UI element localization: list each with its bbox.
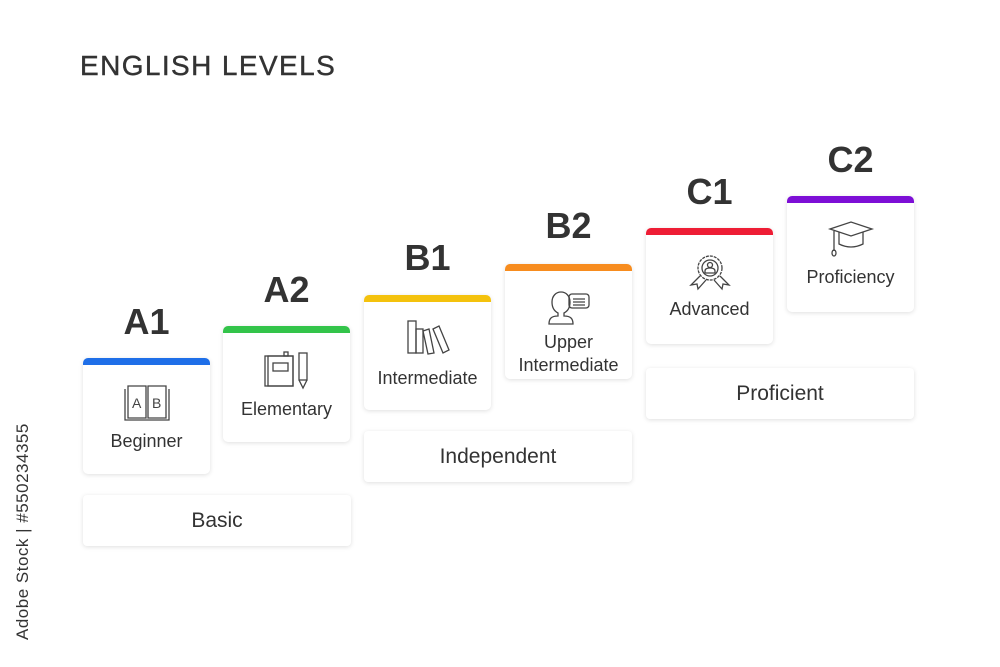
card: C2 Proficiency: Proficiency [806, 267, 895, 287]
card: C2 Proficiency [787, 196, 914, 312]
card: B2 Upper Intermediate [505, 264, 632, 379]
card: B2 Upper Intermediate: Upper [544, 332, 593, 352]
icon: open book AB: B [152, 395, 161, 411]
card: C1 Advanced [646, 228, 773, 344]
level label B2: B2 [545, 205, 592, 246]
group: Independent: Independent [440, 445, 556, 468]
group: Basic [83, 495, 351, 546]
icon: award badge [689, 255, 731, 290]
level label A1: A1 [123, 301, 170, 342]
level label C1: C1 [686, 171, 733, 212]
level label A2: A2 [263, 269, 310, 310]
group: Basic: Basic [191, 509, 243, 532]
card: A2 Elementary: Elementary [241, 399, 332, 419]
credit text: Adobe Stock | #550234355 [13, 423, 32, 640]
title: ENGLISH LEVELS [80, 50, 336, 81]
group: Independent [364, 431, 632, 482]
card: B1 Intermediate: Intermediate [377, 368, 478, 388]
card: A2 Elementary [223, 326, 350, 442]
group: Proficient [646, 368, 914, 419]
level label C2: C2 [827, 139, 874, 180]
icon: open book AB [124, 385, 170, 421]
icon: notebook and pen [264, 351, 308, 390]
icon: graduation cap [828, 221, 874, 257]
card: C1 Advanced: Advanced [669, 299, 750, 319]
icon: open book AB: A [132, 395, 142, 411]
card: B2 Upper Intermediate: Intermediate [518, 355, 619, 375]
card: A1 Beginner [83, 358, 210, 474]
icon: person speaking [548, 291, 590, 325]
card: A1 Beginner: Beginner [110, 431, 183, 451]
card: B1 Intermediate [364, 295, 491, 410]
level label B1: B1 [404, 237, 451, 278]
group: Proficient: Proficient [736, 382, 824, 405]
icon: books [407, 320, 450, 355]
